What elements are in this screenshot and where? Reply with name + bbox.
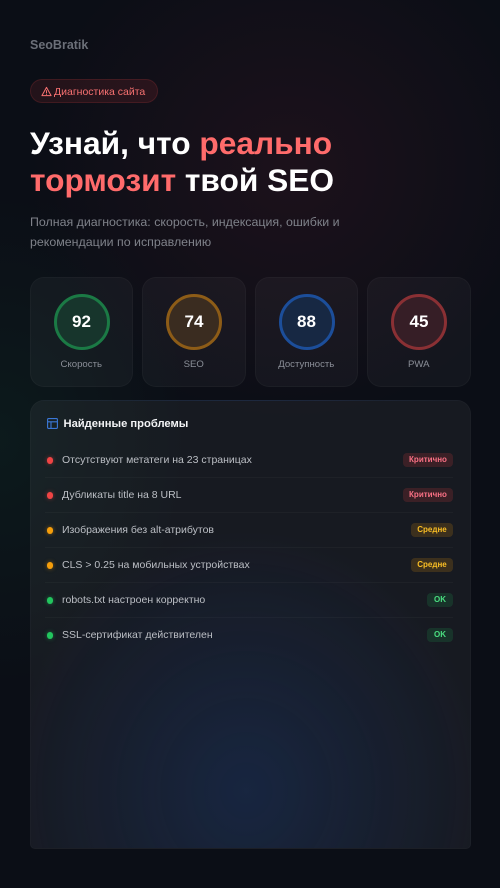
icon: warning triangle <box>41 86 52 96</box>
score ring: 88 <box>297 312 316 331</box>
status dot <box>46 597 53 604</box>
issue: SSL ok <box>45 628 453 642</box>
severity tag: Критично <box>409 455 447 464</box>
issue text: Отсутствуют метатеги на 23 страницах <box>62 454 252 466</box>
issue: robots.txt ok <box>45 593 453 607</box>
panel: found issues <box>30 400 470 848</box>
issue: CLS on mobile <box>44 558 453 572</box>
badge: site diagnostics <box>30 79 158 103</box>
score card: speed <box>30 277 133 387</box>
issue: missing meta tags <box>44 453 453 467</box>
severity tag <box>403 453 453 467</box>
severity tag: OK <box>434 595 446 604</box>
score card: SEO <box>142 277 246 387</box>
title: тормозит твой SEO <box>30 162 334 198</box>
status dot <box>46 457 53 464</box>
score label: SEO <box>184 359 204 370</box>
status dot <box>46 562 53 568</box>
severity tag <box>411 523 453 537</box>
score ring: 92 <box>72 312 91 331</box>
score label: PWA <box>408 359 430 370</box>
severity tag: OK <box>434 630 446 639</box>
panel heading: Найденные проблемы <box>64 418 188 430</box>
issue: missing alt attributes <box>44 523 453 537</box>
status dot <box>46 632 53 638</box>
severity tag: Средне <box>417 525 447 534</box>
issue text: robots.txt настроен корректно <box>62 594 205 606</box>
subtitle: рекомендации по исправлению <box>30 235 211 249</box>
score card: accessibility <box>254 277 358 387</box>
score ring: 45 <box>410 312 428 331</box>
severity tag <box>427 593 453 607</box>
score ring <box>278 294 334 350</box>
score label: Скорость <box>61 359 102 370</box>
score label: Доступность <box>278 359 334 370</box>
score ring <box>166 294 222 350</box>
icon: layout <box>47 418 58 429</box>
issue text: CLS > 0.25 на мобильных устройствах <box>62 559 250 571</box>
title <box>30 125 334 198</box>
subtitle: Полная диагностика: скорость, индексация, ошибки и <box>30 215 340 229</box>
issue text: Изображения без alt-атрибутов <box>62 524 214 536</box>
status dot <box>46 492 53 498</box>
severity tag <box>427 628 453 642</box>
severity tag: Средне <box>417 560 447 569</box>
brand logo: SeoBratik <box>30 38 88 52</box>
issue text: SSL-сертификат действителен <box>62 629 213 641</box>
status dot <box>46 527 53 534</box>
title: Узнай, что реально <box>30 125 332 161</box>
score ring: 74 <box>185 312 203 331</box>
issue text: Дубликаты title на 8 URL <box>62 489 182 501</box>
score ring <box>391 294 447 350</box>
severity tag <box>411 558 453 572</box>
subtitle <box>30 215 340 249</box>
severity tag <box>403 488 453 502</box>
severity tag: Критично <box>409 490 447 499</box>
score card: PWA <box>367 277 470 387</box>
score ring <box>54 294 110 350</box>
issue: duplicate titles <box>44 488 453 502</box>
badge label: Диагностика сайта <box>54 86 145 98</box>
